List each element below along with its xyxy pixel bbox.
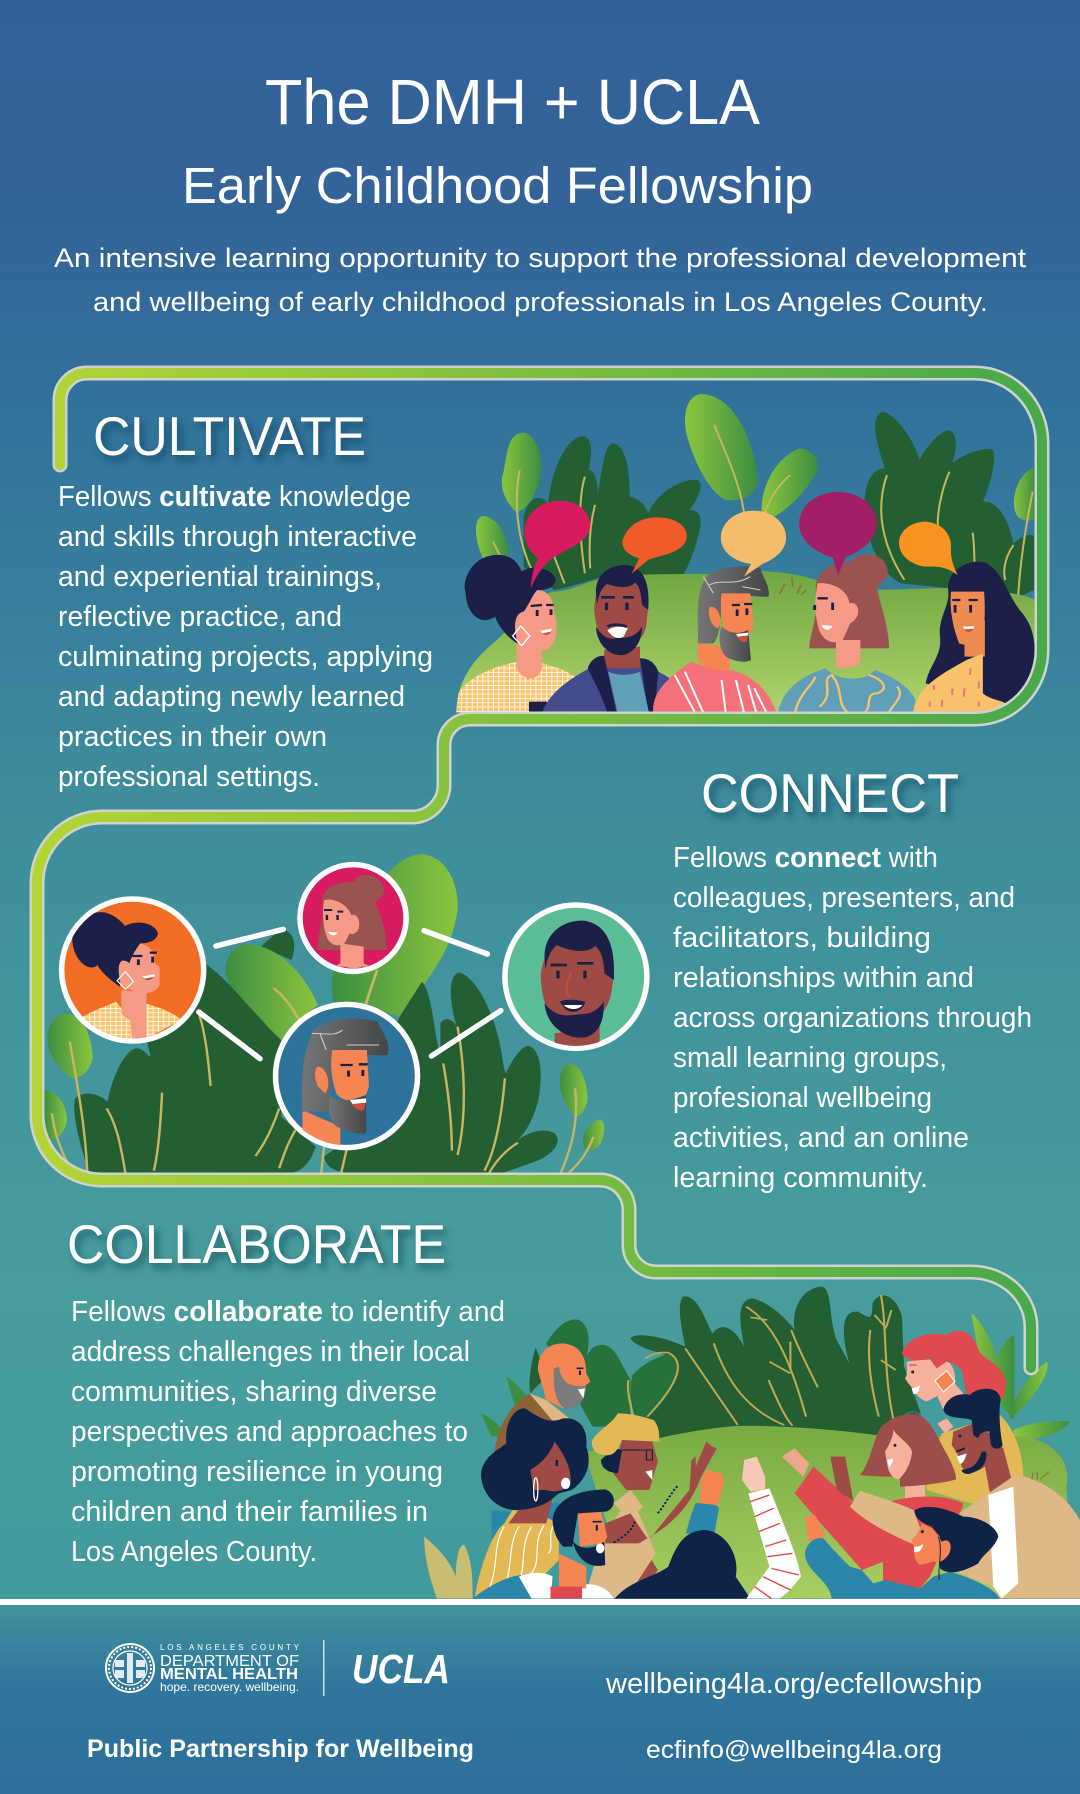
logo: UCLA: UCLA	[352, 1646, 450, 1692]
heading: connect: CONNECT	[701, 762, 959, 824]
woman with brown hair	[850, 1412, 963, 1588]
person 3	[653, 566, 777, 713]
illustration: connect network of portraits	[44, 854, 647, 1173]
bald man	[494, 1343, 590, 1460]
red-haired woman	[902, 1331, 1006, 1433]
text: email: ecfinfo@wellbeing4la.org	[646, 1736, 942, 1764]
text: cultivate body: culminating projects, applying	[58, 641, 433, 673]
intro text	[54, 243, 1027, 317]
teal sleeve and hand	[686, 1470, 724, 1533]
text: connect body: activities, and an online	[673, 1122, 969, 1154]
footer band	[0, 1599, 1080, 1794]
text: connect body: colleagues, presenters, and	[673, 882, 1015, 914]
logo text: department of mental health	[160, 1643, 300, 1694]
text: cultivate body: and skills through interactive	[58, 521, 417, 553]
red jacket	[795, 1467, 963, 1588]
text: collaborate body	[71, 1296, 505, 1568]
front woman in teal	[805, 1507, 1000, 1599]
intro text: and wellbeing of early childhood professionals in Los Angeles County.	[93, 287, 988, 317]
illustration: cultivate group with speech bubbles	[456, 394, 1035, 713]
logo text: department of mental health: DEPARTMENT OF	[160, 1653, 299, 1670]
text: connect body: small learning groups,	[673, 1042, 947, 1074]
text: connect body: learning community.	[673, 1162, 928, 1194]
bearded man front	[473, 1489, 614, 1599]
logo text: department of mental health: MENTAL HEALTH	[160, 1666, 298, 1683]
portrait: man with beard on green	[505, 905, 647, 1053]
text: cultivate body: practices in their own	[58, 721, 327, 753]
text: collaborate body: children and their families in	[71, 1496, 428, 1528]
person 5	[913, 562, 1035, 713]
striped arm	[742, 1457, 801, 1599]
person 4	[778, 554, 916, 713]
speech bubble: purple	[799, 492, 877, 575]
text: cultivate body: and adapting newly learned	[58, 681, 405, 713]
portrait: woman with bun on orange	[62, 899, 204, 1041]
man with dark curls	[943, 1389, 1013, 1493]
text: cultivate body: reflective practice, and	[58, 601, 342, 633]
text: collaborate body: promoting resilience in young	[71, 1456, 443, 1488]
blond man	[584, 1413, 717, 1599]
text: connect body: Fellows connect with	[673, 842, 938, 874]
woman in yellow	[475, 1408, 589, 1599]
logo text: department of mental health: hope. recovery. wellbeing.	[160, 1680, 299, 1694]
dark long hair	[614, 1530, 750, 1599]
text: connect body: profesional wellbeing	[673, 1082, 932, 1114]
portrait: man with grey beard on blue	[276, 1004, 418, 1148]
logo text: department of mental health: LOS ANGELES COUNTY	[160, 1643, 300, 1652]
text: cultivate body: professional settings.	[58, 761, 320, 793]
text: collaborate body: perspectives and approaches to	[71, 1416, 468, 1448]
heading: cultivate: CULTIVATE	[93, 405, 366, 467]
text: cultivate body	[58, 481, 433, 793]
person 2	[542, 565, 673, 713]
text: connect body: relationships within and	[673, 962, 974, 994]
text: cultivate body: Fellows cultivate knowledge	[58, 481, 411, 513]
connector lines	[199, 929, 501, 1059]
speech bubble: tan	[721, 511, 786, 577]
text: cultivate body: and experiential trainings,	[58, 561, 382, 593]
speech bubble: pink	[524, 501, 590, 588]
intro text: An intensive learning opportunity to support the professional development	[54, 243, 1027, 273]
logo: LA County DMH seal	[106, 1644, 154, 1692]
text: connect body	[673, 842, 1032, 1194]
orange raised hand	[805, 1515, 825, 1542]
logo divider	[323, 1640, 324, 1696]
tan plant	[424, 1537, 473, 1599]
subtitle: Early Childhood Fellowship	[182, 157, 813, 214]
person 1	[456, 555, 575, 713]
yellow torso	[927, 1415, 1023, 1507]
text: collaborate body: Los Angeles County.	[71, 1536, 317, 1568]
illustration: right-hand group of people	[805, 1331, 1080, 1599]
text: public partnership: Public Partnership for Wellbeing	[87, 1735, 474, 1763]
heading: collaborate: COLLABORATE	[67, 1213, 446, 1275]
hill	[584, 1426, 1077, 1599]
text: collaborate body: communities, sharing diverse	[71, 1376, 437, 1408]
speech bubble: amber	[899, 522, 958, 575]
tan jacket person	[958, 1471, 1080, 1599]
text: connect body: across organizations through	[673, 1002, 1032, 1034]
raised hands	[782, 1448, 854, 1502]
portrait: woman with hair bun on pink	[300, 865, 406, 971]
title: The DMH + UCLA	[265, 66, 760, 138]
hill	[456, 571, 1035, 713]
winding path	[37, 373, 1042, 1368]
text: website: wellbeing4la.org/ecfellowship	[605, 1668, 982, 1700]
text: collaborate body: Fellows collaborate to identify and	[71, 1296, 505, 1328]
text: connect body: facilitators, building	[673, 922, 931, 954]
illustration: collaborate group with raised hands	[424, 1287, 1077, 1599]
speech bubble: orange	[622, 517, 687, 573]
text: collaborate body: address challenges in their local	[71, 1336, 470, 1368]
